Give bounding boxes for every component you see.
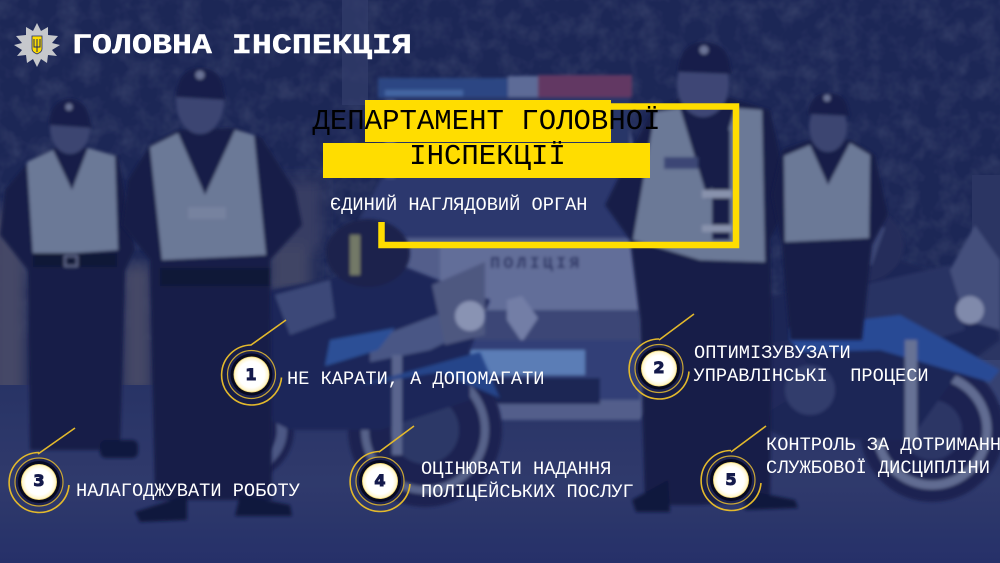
left motorcycle xyxy=(194,219,502,507)
police car xyxy=(350,75,655,420)
title block xyxy=(312,100,736,245)
item 2: ОПТИМІЗУВУЗАТИ xyxy=(694,342,851,364)
item 4: ПОЛІЦЕЙСЬКИХ ПОСЛУГ xyxy=(421,481,634,503)
department title: ІНСПЕКЦІЇ xyxy=(409,140,566,173)
item 5: 5 xyxy=(725,470,737,489)
pole xyxy=(342,0,368,105)
yellow frame xyxy=(382,106,736,245)
item 1: НЕ КАРАТИ, А ДОПОМАГАТИ xyxy=(287,368,544,390)
header badge: police star with trident xyxy=(14,23,60,67)
officer 3 xyxy=(605,42,798,512)
yellow highlight bottom xyxy=(323,143,650,178)
officer 1 xyxy=(0,99,138,458)
item 3 xyxy=(9,428,300,512)
item 4: 4 xyxy=(374,471,386,490)
autumn foliage xyxy=(0,180,322,400)
item 1: 1 xyxy=(245,365,257,384)
item 5 xyxy=(701,426,1000,510)
item 2: УПРАВЛІНСЬКІ ПРОЦЕСИ xyxy=(694,365,929,387)
subtitle: ЄДИНИЙ НАГЛЯДОВИЙ ОРГАН xyxy=(330,194,588,216)
police car: ПОЛІЦІЯ xyxy=(490,255,582,274)
yellow highlight top xyxy=(365,100,611,142)
officer 2 xyxy=(122,68,302,522)
item 2: 2 xyxy=(653,358,665,377)
item 3: 3 xyxy=(33,471,45,490)
item 4 xyxy=(350,426,634,511)
officer 4 xyxy=(772,93,888,340)
department title: ДЕПАРТАМЕНТ ГОЛОВНОЇ xyxy=(312,105,661,138)
item 2 xyxy=(629,314,929,399)
heading: main inspection: ГОЛОВНА ІНСПЕКЦІЯ xyxy=(72,30,412,62)
item 3: НАЛАГОДЖУВАТИ РОБОТУ xyxy=(76,480,300,502)
item 5: СЛУЖБОВОЇ ДИСЦИПЛІНИ xyxy=(766,457,990,479)
item 1 xyxy=(222,320,544,405)
item 4: ОЦІНЮВАТИ НАДАННЯ xyxy=(421,458,611,480)
right motorcycle xyxy=(690,208,1000,502)
road xyxy=(0,385,1000,563)
